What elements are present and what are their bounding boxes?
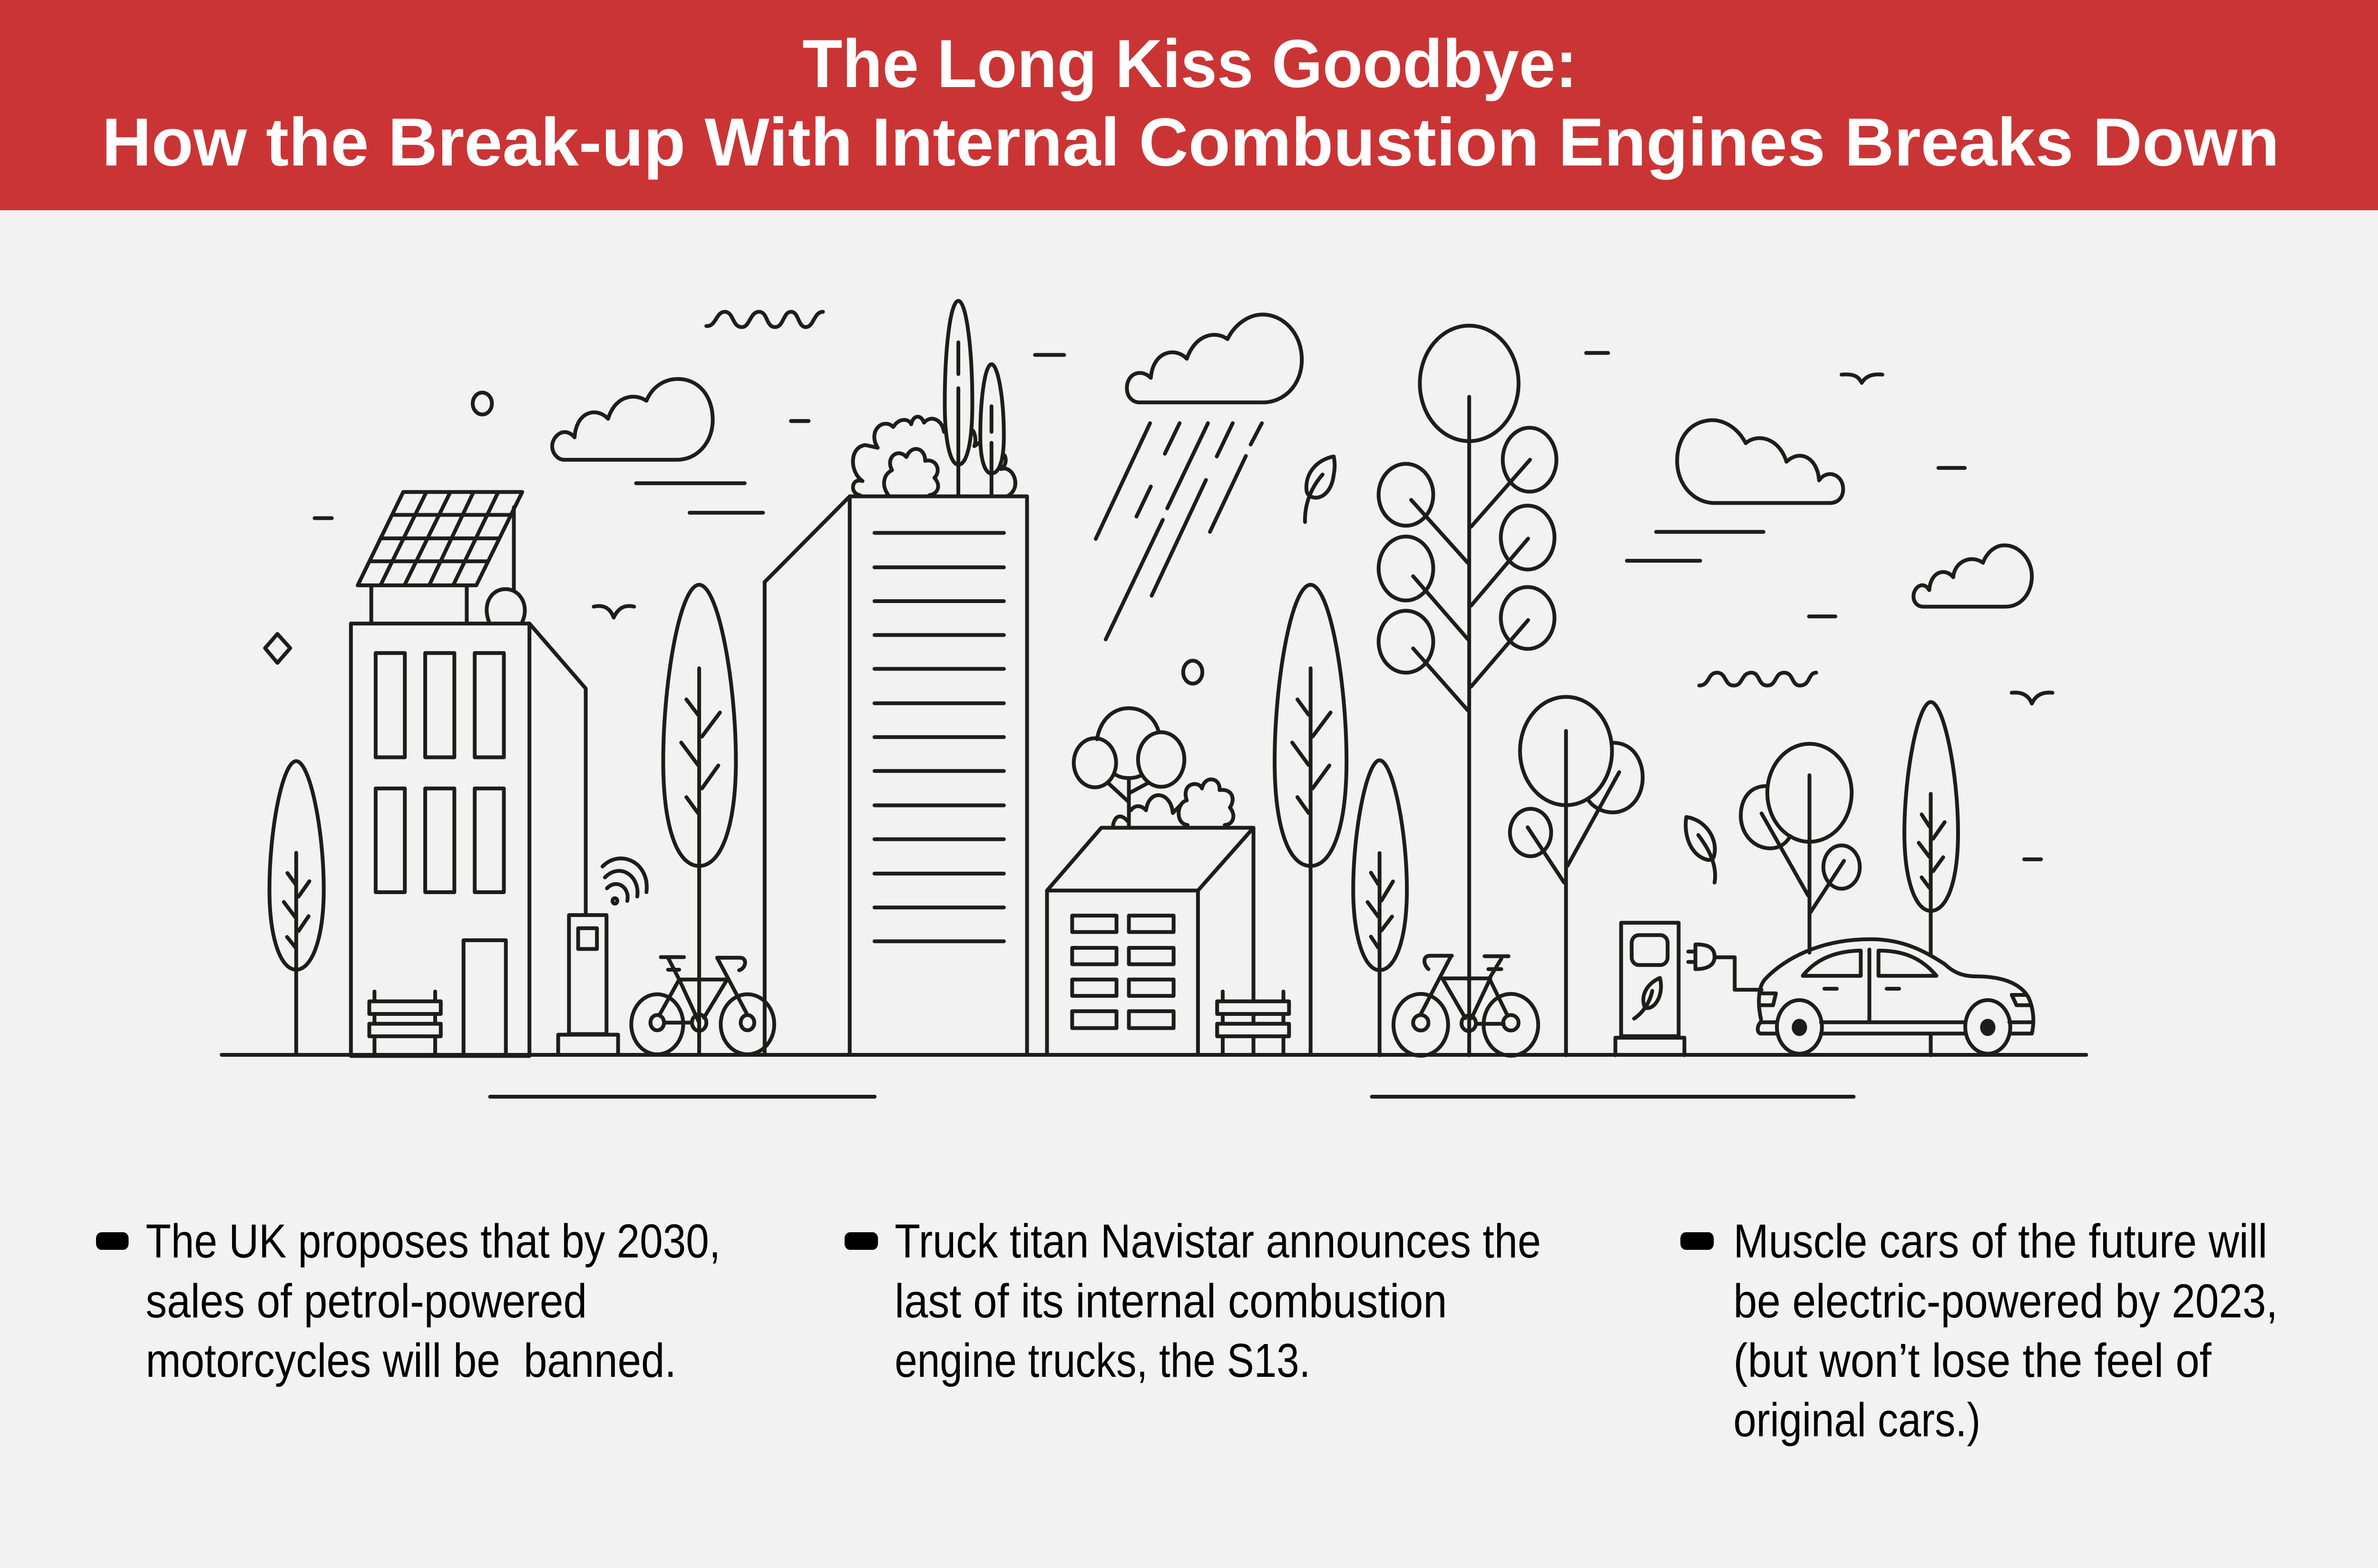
apartment building bbox=[351, 623, 586, 1056]
lollipop tree bbox=[1379, 326, 1557, 1055]
ground line bbox=[222, 1055, 2086, 1097]
low building bbox=[1047, 828, 1254, 1055]
EV charger bbox=[1615, 923, 1685, 1055]
leaf bbox=[1305, 457, 1335, 522]
bullet: muscle cars: be electric-powered by 2023, bbox=[1734, 1275, 2278, 1327]
small tree, far left bbox=[270, 761, 324, 1055]
title: How the Break-up With Internal Combustion Engines Breaks Down bbox=[102, 104, 2280, 180]
bullet: UK motorcycles: motorcycles will be banned. bbox=[146, 1334, 676, 1387]
cloud bbox=[552, 379, 713, 460]
city illustration bbox=[222, 301, 2086, 1097]
bicycle bbox=[1394, 956, 1538, 1056]
bullet: UK motorcycles: sales of petrol-powered bbox=[146, 1275, 587, 1327]
bullet: UK motorcycles: The UK proposes that by 2030, bbox=[146, 1215, 721, 1267]
sky details, right bbox=[1586, 353, 2053, 859]
sky details, left bbox=[265, 312, 823, 663]
tree on low building bbox=[1074, 708, 1233, 827]
small cloud bbox=[1913, 545, 2032, 607]
electric car bbox=[1758, 939, 2033, 1054]
tower block bbox=[765, 497, 1027, 1055]
bullet: muscle cars bbox=[1680, 1215, 2278, 1446]
title bbox=[102, 25, 2280, 180]
bullet: Navistar trucks: last of its internal combustion bbox=[895, 1275, 1447, 1327]
bullet: muscle cars: original cars.) bbox=[1734, 1393, 1980, 1446]
rooftop trees and bushes bbox=[853, 301, 1015, 497]
title: The Long Kiss Goodbye: bbox=[802, 25, 1577, 102]
leaf bbox=[1686, 817, 1715, 883]
small tree bbox=[1353, 760, 1407, 1055]
bench bbox=[369, 992, 441, 1055]
bullet: Navistar trucks: Truck titan Navistar announces the bbox=[895, 1215, 1541, 1267]
cloud bbox=[1677, 420, 1843, 503]
bullet: muscle cars: Muscle cars of the future will bbox=[1734, 1215, 2267, 1267]
bullet: Navistar trucks: engine trucks, the S13. bbox=[895, 1334, 1310, 1387]
slim tree bbox=[1904, 702, 1958, 1055]
header banner bbox=[0, 0, 2378, 210]
tall tree bbox=[1275, 585, 1346, 1055]
bench bbox=[1217, 992, 1289, 1055]
tall tree bbox=[663, 585, 736, 1055]
middle part of scene bbox=[765, 301, 1346, 1055]
charging post with wifi bbox=[558, 858, 647, 1055]
bullet: muscle cars: (but won’t lose the feel of bbox=[1734, 1334, 2212, 1387]
right part of scene bbox=[1353, 326, 2053, 1056]
bullet: Navistar trucks bbox=[845, 1215, 1541, 1387]
bicycle bbox=[631, 957, 774, 1054]
bullet: UK motorcycles bbox=[96, 1215, 721, 1387]
round tree bbox=[1510, 697, 1643, 1055]
plug and cable bbox=[1688, 945, 1762, 990]
rain cloud bbox=[1096, 314, 1302, 639]
round tree behind car bbox=[1741, 744, 1860, 953]
sky details, middle bbox=[791, 355, 1202, 683]
solar panel bbox=[358, 492, 525, 623]
left part of scene bbox=[265, 312, 823, 1056]
